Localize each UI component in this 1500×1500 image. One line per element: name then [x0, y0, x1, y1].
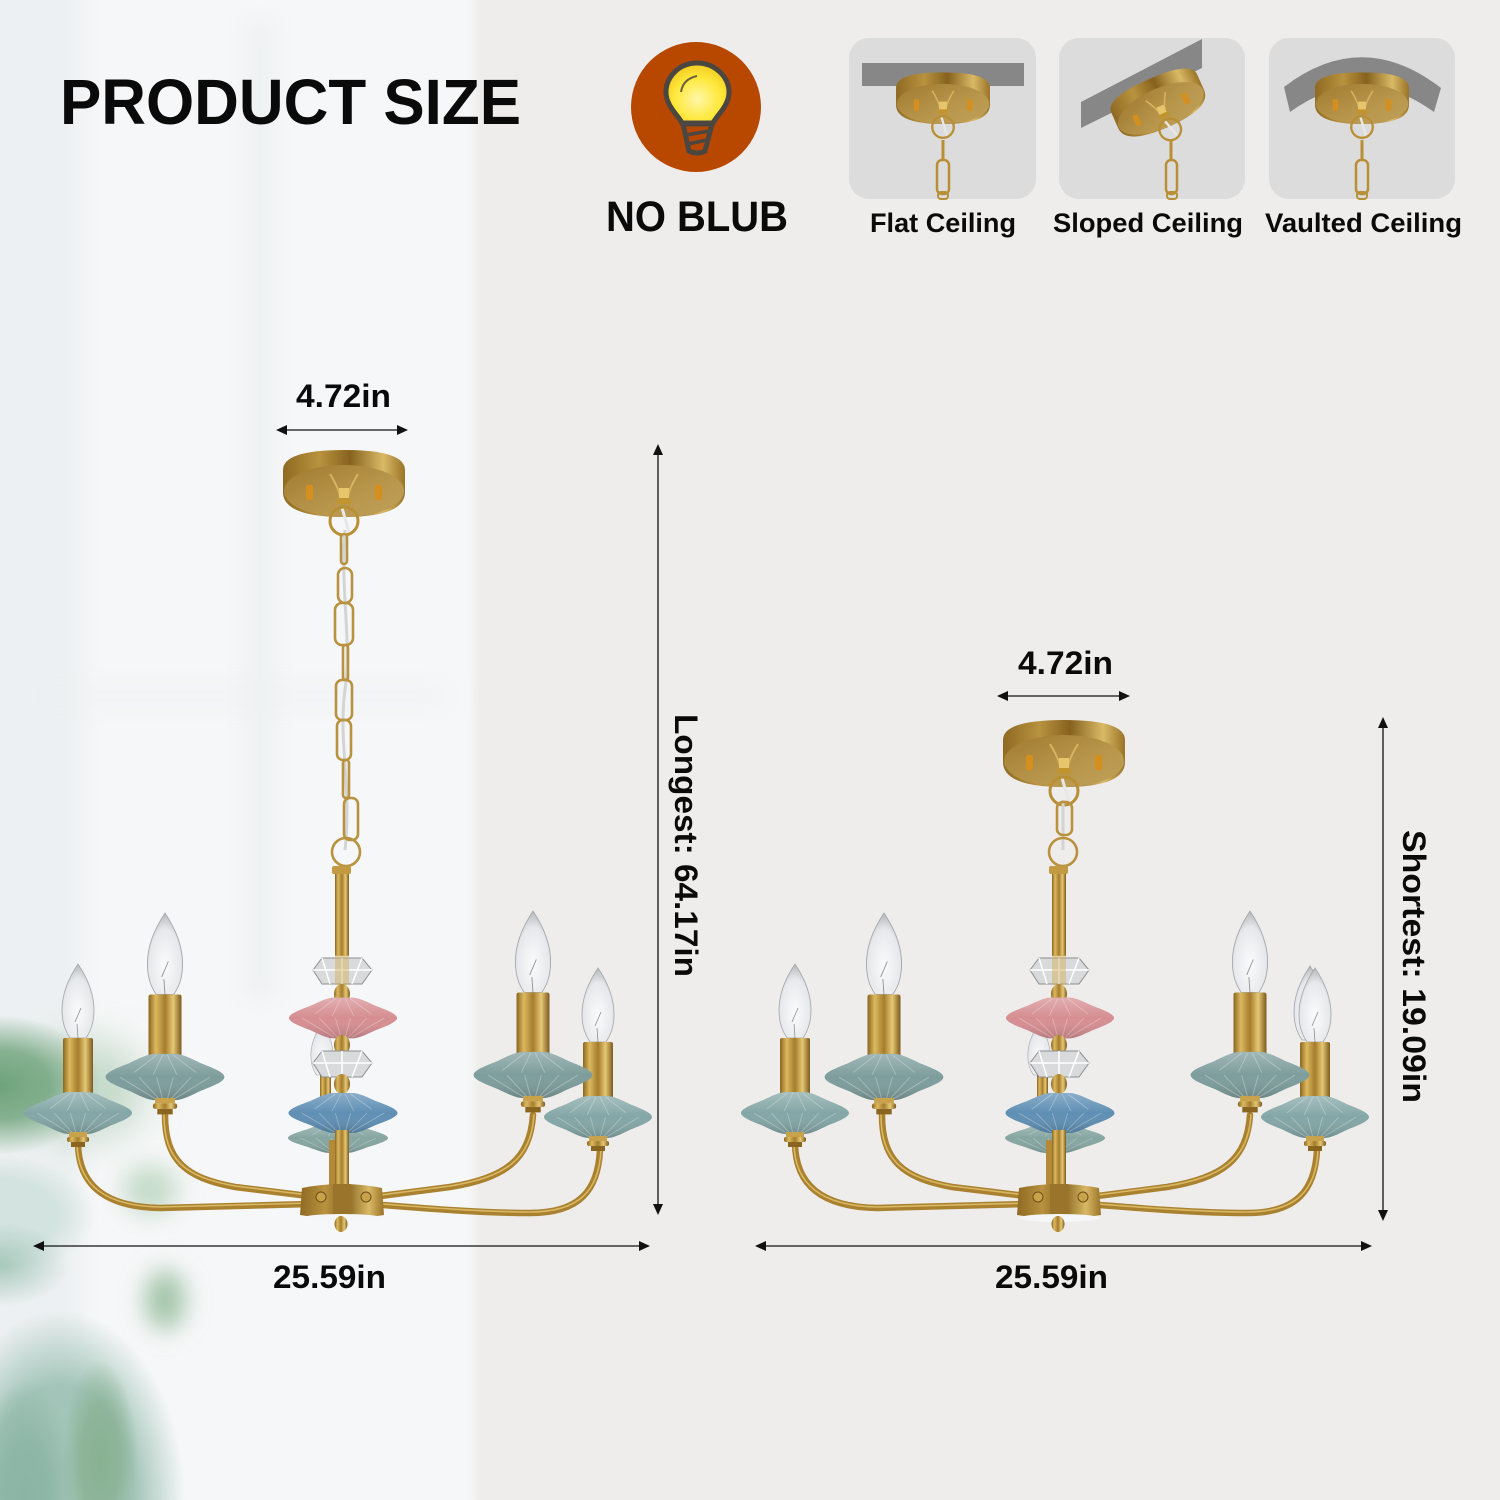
right extra back bulb [1294, 966, 1326, 1040]
dimension: right shortest height [1378, 717, 1432, 1221]
dimension: right canopy width: 4.72in [1018, 645, 1113, 681]
label: flat ceiling: Flat Ceiling [870, 208, 1016, 238]
dimension: left longest height [653, 444, 704, 1215]
label: vaulted ceiling: Vaulted Ceiling [1265, 208, 1462, 238]
left lamp far right [544, 968, 652, 1151]
dimension: left width: 25.59in [273, 1259, 386, 1295]
panel: sloped ceiling [1059, 38, 1245, 199]
left lamp near left [106, 913, 224, 1114]
icon: no bulb light bulb badge [631, 42, 761, 172]
title: PRODUCT SIZE [60, 66, 521, 138]
right central column [1005, 866, 1114, 1186]
no bulb caption: NO BLUB [606, 193, 788, 241]
left chain [332, 530, 360, 866]
right lamp near right [1191, 911, 1309, 1112]
dimension: right width: 25.59in [995, 1259, 1108, 1295]
right chain [1049, 800, 1077, 866]
left canopy [283, 450, 405, 535]
label: sloped ceiling: Sloped Ceiling [1053, 208, 1243, 238]
left lamp far left [24, 964, 132, 1147]
dimension: left longest height: Longest: 64.17in [668, 714, 704, 977]
left lamp near right [474, 911, 592, 1112]
right canopy [1003, 720, 1125, 805]
panel: vaulted ceiling [1269, 38, 1455, 199]
left hub [300, 1184, 384, 1232]
left arms [77, 1115, 601, 1213]
dimension: right shortest height: Shortest: 19.09in [1396, 830, 1432, 1103]
right lamp near left [825, 913, 943, 1114]
panel: flat ceiling [849, 38, 1036, 199]
right lamp far left [741, 964, 849, 1147]
left central column [288, 866, 398, 1186]
dimension: left canopy width: 4.72in [296, 378, 391, 414]
right hub [1017, 1184, 1101, 1232]
right arms [794, 1115, 1318, 1213]
dimension: left width [33, 1241, 650, 1295]
dimension: right canopy width [997, 645, 1130, 701]
right lamp far right [1261, 968, 1369, 1151]
dimension: left canopy width [276, 378, 408, 435]
dimension: right width [755, 1241, 1372, 1295]
right chandelier, shortest chain [741, 720, 1369, 1232]
left chandelier, longest chain [24, 450, 652, 1232]
